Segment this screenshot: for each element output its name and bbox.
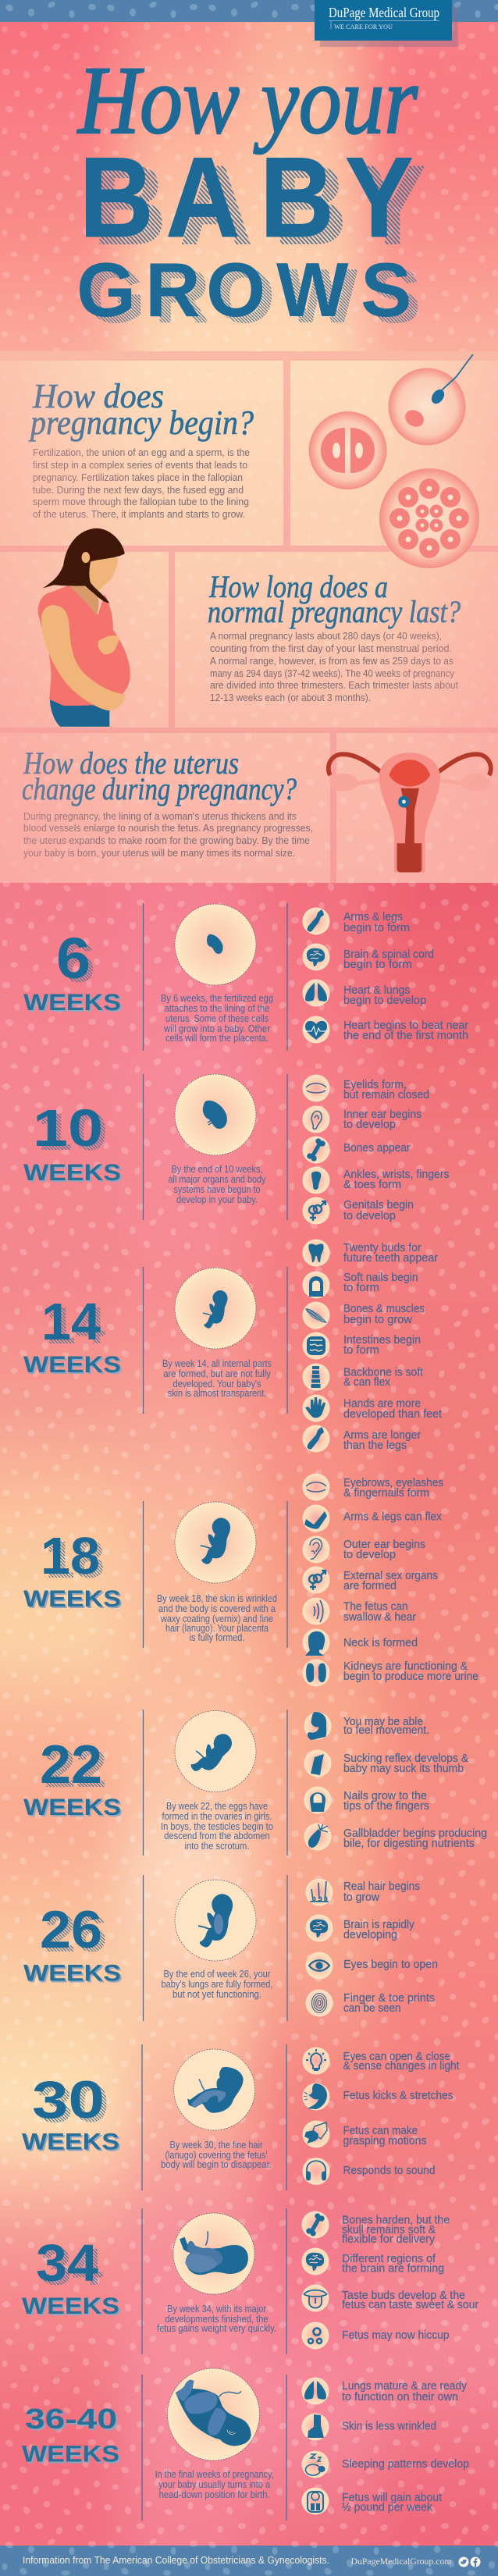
number: 6: [61, 930, 95, 994]
number: 36-40: [27, 2404, 119, 2436]
item: genitals: Genitals begin: [343, 1199, 414, 1212]
item: prints: [306, 1989, 435, 2017]
item: intestines: [303, 1332, 421, 1360]
icon: facebook: [470, 2557, 481, 2567]
caption: In boys, the testicles begin to: [161, 1821, 273, 1832]
caption: into the scrotum.: [184, 1841, 250, 1852]
item: outer ear: [303, 1536, 425, 1563]
number: 26: [40, 1900, 102, 1959]
body text: counting from the first day of your last menstrual period.: [210, 642, 452, 654]
section: 36-40 weeks: [22, 2368, 469, 2521]
item: brain: Brain is rapidly: [343, 1919, 415, 1931]
item: arms and legs: [303, 907, 410, 935]
item: bones harden: Bones harden, but the: [342, 2214, 450, 2226]
number: 30: [37, 2074, 109, 2133]
panel: how long does pregnancy last: [0, 552, 498, 728]
body text: Fertilization, the union of an egg and a sperm, is the: [33, 447, 250, 458]
item: soft nails: [303, 1271, 418, 1299]
heading: pregnancy begin?: [28, 404, 254, 442]
top band: [0, 0, 498, 22]
weeks label: WEEKS: [23, 1352, 121, 1378]
item: swallow and hear: The fetus can: [343, 1600, 408, 1613]
item: backbone: & can flex: [343, 1376, 391, 1389]
item: brain and spinal cord: [303, 943, 434, 971]
caption: developments finished, the: [165, 2314, 269, 2325]
caption: [161, 1969, 273, 2000]
item: nails: tips of the fingers: [343, 1800, 429, 1813]
number: 36-40: [25, 2403, 117, 2435]
item: arms and legs: Arms & legs: [343, 911, 403, 923]
caption: is fully formed.: [189, 1632, 245, 1643]
item: eyelids: but remain closed: [343, 1089, 429, 1101]
item: sucking reflex: Sucking reflex develops &: [343, 1752, 468, 1765]
heading: change during pregnancy?: [22, 771, 297, 806]
item: lungs mature: [301, 2378, 468, 2404]
item: arms and legs: begin to form: [343, 922, 410, 934]
item: hair: Real hair begins: [343, 1880, 420, 1893]
item: hands: Hands are more: [343, 1397, 421, 1410]
caption: [169, 1164, 266, 1205]
section: 26 weeks: [23, 1875, 438, 2021]
checklist: [303, 1474, 478, 1686]
fetus circle: [175, 1880, 256, 1961]
title line shadow: BABY: BABY: [93, 142, 427, 269]
item: brain and spinal cord: Brain & spinal cord: [343, 948, 434, 961]
weeks label: WEEKS: [22, 2129, 119, 2154]
weeks label: WEEKS: [25, 1588, 123, 1614]
title line: BABY: BABY: [80, 134, 414, 262]
divider: [144, 1074, 287, 1220]
body text: your baby is born, your uterus will be many times its normal size.: [23, 847, 295, 859]
item: teeth: [303, 1240, 438, 1266]
body text: tube. During the next few days, the fused egg and: [33, 484, 244, 496]
number: 14: [41, 1293, 101, 1351]
item: movement: You may be able: [343, 1716, 423, 1728]
item: lungs mature: Lungs mature & are ready: [342, 2380, 468, 2393]
item: hiccup: [301, 2322, 450, 2350]
weeks label: WEEKS: [22, 2442, 119, 2467]
section: 30 weeks: [22, 2044, 459, 2190]
item: inner ear: Inner ear begins: [343, 1108, 422, 1121]
number: 22: [44, 1738, 107, 1799]
intro backdrop band: [0, 351, 498, 883]
item: bones and muscles: begin to grow: [343, 1314, 413, 1326]
item: arms longer: [303, 1425, 421, 1452]
website: DuPageMedicalGroup.com: [351, 2556, 452, 2567]
item: teeth: Twenty buds for: [343, 1242, 422, 1254]
item: kicks: Fetus kicks & stretches: [343, 2090, 453, 2102]
item: grasping: [303, 2120, 426, 2148]
item: neck: [303, 1628, 418, 1656]
item: sucking reflex: baby may suck its thumb: [343, 1763, 464, 1775]
item: taste: fetus can taste sweet & sour: [342, 2299, 478, 2311]
body text: During pregnancy, the lining of a woman's uterus thickens and its: [23, 810, 297, 822]
section: 34 weeks: [22, 2208, 478, 2354]
item: backbone: Backbone is soft: [343, 1366, 423, 1379]
item: outer ear: Outer ear begins: [343, 1539, 425, 1551]
item: nails: Nails grow to the: [343, 1790, 427, 1802]
checklist: [303, 1074, 450, 1224]
panel edge tint: [0, 361, 498, 883]
item: bones: Bones appear: [343, 1142, 411, 1155]
caption: all major organs and body: [169, 1174, 266, 1185]
caption: baby's lungs are fully formed,: [161, 1979, 273, 1990]
fetus circle: [167, 2368, 259, 2460]
item: eyebrows: Eyebrows, eyelashes: [343, 1477, 443, 1489]
title line: How your: How your: [76, 47, 418, 154]
checklist: [306, 1878, 438, 2017]
item: heart and lungs: begin to develop: [343, 994, 426, 1007]
weeks label: WEEKS: [23, 2295, 121, 2321]
caption: In the final weeks of pregnancy,: [155, 2469, 274, 2480]
item: gallbladder: [304, 1823, 487, 1850]
caption: By week 18, the skin is wrinkled: [157, 1593, 277, 1604]
caption: [155, 2469, 274, 2500]
divider: [144, 903, 287, 1051]
item: weight gain: Fetus will gain about: [342, 2492, 442, 2504]
item: movement: [304, 1712, 429, 1740]
number: 22: [40, 1734, 102, 1795]
weeks label: WEEKS: [25, 991, 123, 1017]
body text: are divided into three trimesters. Each trimester lasts about: [210, 679, 458, 691]
item: intestines: to form: [343, 1344, 379, 1357]
heading: How does the uterus: [23, 745, 239, 781]
caption: [161, 2140, 272, 2170]
item: weight gain: [301, 2487, 442, 2515]
number: 6: [56, 926, 91, 991]
body text: first step in a complex series of events that leads to: [33, 459, 247, 471]
body text: blood vessels enlarge to nourish the fetus. As pregnancy progresses,: [23, 822, 313, 834]
divider: [142, 2375, 286, 2521]
heading: normal pregnancy last?: [208, 594, 461, 629]
item: hair: to grow: [343, 1891, 379, 1904]
item: grasping: grasping motions: [343, 2135, 426, 2147]
item: ankles and wrists: & toes form: [343, 1179, 401, 1191]
item: brain: [306, 1914, 415, 1942]
body text: A normal pregnancy lasts about 280 days (or 40 weeks),: [210, 630, 442, 642]
section: 10 weeks: [23, 1074, 450, 1224]
weeks label: WEEKS: [23, 1160, 121, 1186]
caption: [162, 1358, 272, 1399]
item: hiccup: Fetus may now hiccup: [342, 2329, 450, 2342]
item: brain regions: [301, 2248, 444, 2275]
item: genitals: to develop: [343, 1210, 396, 1222]
item: grasping: Fetus can make: [343, 2125, 418, 2137]
body text: the uterus expands to make room for the growing baby. By the time: [23, 834, 310, 846]
caption: [157, 1593, 277, 1643]
body text: many as 294 days (37-42 weeks). The 40 weeks of pregnancy: [210, 667, 454, 679]
body text: of the uterus. There, it implants and starts to grow.: [33, 508, 245, 520]
checklist: [303, 1240, 442, 1452]
item: skin: Skin is less wrinkled: [342, 2420, 436, 2432]
weeks label: WEEKS: [22, 2293, 119, 2319]
checklist: [301, 2378, 469, 2515]
item: kicks: [303, 2083, 453, 2111]
fetus circle: [175, 1711, 256, 1792]
body text: [33, 447, 250, 520]
weeks label: WEEKS: [23, 1586, 121, 1612]
item: inner ear: to develop: [343, 1119, 396, 1131]
number: 26: [44, 1904, 107, 1963]
number: 18: [41, 1527, 100, 1585]
item: bones and muscles: Bones & muscles: [343, 1303, 425, 1315]
item: bones: [303, 1137, 411, 1163]
item: hair: [306, 1878, 420, 1906]
item: eyebrows: & fingernails form: [343, 1487, 429, 1500]
item: brain regions: Different regions of: [342, 2253, 436, 2265]
item: intestines: Intestines begin: [343, 1334, 421, 1347]
caption: uterus. Some of these cells: [165, 1013, 269, 1024]
item: ankles and wrists: Ankles, wrists, fingers: [343, 1169, 450, 1181]
section: 14 weeks: [23, 1240, 442, 1452]
item: sound: [303, 2158, 436, 2185]
item: flex: Arms & legs can flex: [343, 1511, 443, 1524]
item: swallow and hear: [303, 1597, 416, 1625]
caption: By week 14, all internal parts: [162, 1358, 272, 1369]
section: 6 weeks: [23, 903, 468, 1051]
caption: waxy coating (vernix) and fine: [160, 1614, 273, 1624]
fetus circle: [175, 1502, 256, 1583]
item: prints: Finger & toe prints: [343, 1992, 435, 2005]
weeks label: WEEKS: [25, 1796, 123, 1822]
number: 14: [46, 1297, 105, 1355]
item: lungs mature: to function on their own: [342, 2391, 458, 2403]
background: speckle texture: [0, 22, 498, 352]
caption: By the end of week 26, your: [164, 1969, 270, 1980]
fetus circle: [175, 1268, 256, 1349]
number: 34: [36, 2234, 98, 2293]
item: bones harden: flexible for delivery: [342, 2233, 436, 2246]
item: kidneys: begin to produce more urine: [343, 1670, 478, 1683]
weeks label: WEEKS: [23, 1795, 121, 1820]
fetus circle: [175, 904, 256, 985]
body text: [210, 630, 458, 703]
fetus circle: [174, 2049, 255, 2130]
item: sex organs: are formed: [343, 1580, 397, 1592]
item: teeth: future teeth appear: [343, 1252, 438, 1265]
weeks label: WEEKS: [23, 990, 121, 1016]
weeks label: WEEKS: [25, 1162, 123, 1187]
caption: By week 22, the eggs have: [166, 1801, 268, 1812]
item: eyes: Eyes begin to open: [343, 1959, 438, 1971]
caption: but not yet functioning.: [173, 1989, 261, 2000]
background: timeline watercolor gradient: [0, 812, 498, 2576]
caption: (lanugo) covering the fetus': [165, 2150, 267, 2161]
number: 34: [41, 2238, 103, 2297]
item: eyes sense light: & sense changes in light: [343, 2060, 459, 2073]
illustration: uterus: [329, 753, 491, 873]
caption: formed in the ovaries in girls.: [162, 1811, 272, 1822]
fetus circle: [175, 1074, 256, 1155]
icon: cell cluster: [379, 468, 479, 568]
icon: twitter: [459, 2557, 468, 2567]
item: prints: can be seen: [343, 2002, 401, 2015]
divider: [144, 1710, 287, 1856]
item: sleep: Sleeping patterns develop: [342, 2458, 469, 2471]
caption: body will begin to disappear.: [161, 2159, 272, 2170]
body text: 12-13 weeks each (or about 3 months).: [210, 692, 371, 703]
number: 10: [37, 1103, 108, 1162]
background: top pink-to-peach gradient: [0, 22, 498, 351]
caption: will grow into a baby. Other: [163, 1023, 270, 1034]
item: soft nails: Soft nails begin: [343, 1272, 418, 1284]
divider: [142, 2208, 286, 2354]
item: bones and muscles: [303, 1302, 425, 1329]
caption: cells will form the placenta.: [165, 1033, 269, 1044]
caption: [157, 2304, 276, 2334]
number: 10: [33, 1099, 103, 1158]
heading: How long does a: [208, 569, 388, 604]
heading: How does: [32, 377, 164, 415]
item: skin: [301, 2414, 436, 2440]
caption: systems have begun to: [173, 1184, 261, 1195]
caption: develop in your baby.: [176, 1194, 258, 1205]
logo block: DuPage Medical Group: [329, 5, 439, 20]
item: heart beat: Heart begins to beat near: [343, 1019, 468, 1032]
item: soft nails: to form: [343, 1282, 379, 1294]
item: eyes: [306, 1952, 438, 1980]
item: arms longer: Arms are longer: [343, 1429, 421, 1442]
caption: By the end of 10 weeks,: [172, 1164, 262, 1175]
checklist: [303, 907, 468, 1043]
checklist: [301, 2211, 478, 2350]
weeks label: WEEKS: [23, 2443, 121, 2468]
caption: By week 34, with its major: [167, 2304, 266, 2314]
item: flex: [303, 1505, 443, 1532]
divider: [144, 1267, 287, 1414]
caption: are formed, but are not fully: [163, 1368, 271, 1379]
item: heart and lungs: [303, 979, 426, 1007]
caption: fetus gains weight very quickly.: [157, 2323, 276, 2334]
item: ankles and wrists: [303, 1166, 450, 1194]
checklist: [304, 1712, 487, 1850]
section: 18 weeks: [23, 1474, 478, 1686]
caption: [161, 993, 273, 1044]
body text: [23, 810, 313, 859]
item: kidneys: Kidneys are functioning &: [343, 1660, 468, 1673]
item: eyes sense light: [303, 2047, 459, 2075]
caption: attaches to the lining of the: [164, 1003, 270, 1014]
icon: egg and sperm: [389, 354, 473, 445]
caption: descend from the abdomen: [164, 1831, 270, 1841]
source text: Information from The American College of Obstetricians & Gynecologists.: [23, 2554, 329, 2566]
caption: developed. Your baby's: [173, 1379, 261, 1389]
weeks label: WEEKS: [23, 1961, 121, 1986]
divider: [144, 1875, 287, 2021]
number: 30: [32, 2070, 105, 2129]
item: nails: [304, 1786, 429, 1814]
title line shadow: GROWS: GROWS: [86, 253, 421, 339]
body text: pregnancy. Fertilization takes place in the fallopian: [33, 471, 243, 483]
item: neck: Neck is formed: [343, 1637, 418, 1649]
caption: and the body is covered with a: [158, 1603, 276, 1614]
logo block: WE CARE FOR YOU: [334, 23, 393, 30]
number: 18: [45, 1531, 105, 1589]
item: sucking reflex: [304, 1750, 468, 1777]
heading: [208, 569, 461, 629]
item: weight gain: ½ pound per week: [342, 2502, 433, 2514]
item: eyelids: Eyelids form,: [343, 1079, 407, 1091]
item: movement: to feel movement.: [343, 1724, 429, 1737]
caption: head-down position for birth.: [159, 2489, 270, 2500]
body text: A normal range, however, is from as few as 259 days to as: [210, 655, 454, 667]
item: backbone: [303, 1363, 423, 1391]
item: hands: developed than feet: [343, 1408, 442, 1421]
logo block: [315, 0, 457, 47]
caption: skin is almost transparent.: [168, 1388, 266, 1399]
sperm: [429, 354, 473, 406]
item: sex organs: [303, 1566, 438, 1594]
title: [76, 47, 427, 339]
divider: [144, 1501, 287, 1648]
caption: your baby usually turns into a: [158, 2479, 270, 2490]
panel: how does pregnancy begin: [0, 361, 498, 546]
item: swallow and hear: swallow & hear: [343, 1611, 416, 1624]
caption: [161, 1801, 273, 1852]
item: heart beat: the end of the first month: [343, 1030, 468, 1042]
fetus circle: [173, 2213, 254, 2294]
item: genitals: [303, 1197, 414, 1224]
caption: By 6 weeks, the fertilized egg: [161, 993, 273, 1004]
heading: [28, 377, 254, 442]
item: eyelids: [303, 1074, 429, 1102]
checklist: [303, 2047, 459, 2185]
weeks label: WEEKS: [25, 1354, 123, 1379]
item: brain: developing: [343, 1929, 397, 1941]
item: brain and spinal cord: begin to form: [343, 959, 412, 971]
item: kidneys: [303, 1660, 478, 1686]
illustration: pregnant woman: [38, 528, 130, 727]
item: bones harden: [301, 2211, 450, 2246]
item: outer ear: to develop: [343, 1549, 396, 1561]
item: sleep: [301, 2451, 469, 2478]
heading: [22, 745, 297, 806]
item: hands: [303, 1394, 442, 1422]
item: gallbladder: Gallbladder begins producing: [343, 1827, 487, 1840]
weeks label: WEEKS: [23, 2131, 121, 2156]
weeks label: WEEKS: [25, 1962, 123, 1987]
body text: sperm move through the fallopian tube to the lining: [33, 496, 249, 507]
footer band: [0, 2546, 498, 2576]
item: inner ear: [303, 1105, 422, 1133]
item: bones harden: skull remains soft &: [342, 2224, 436, 2236]
item: eyebrows: [303, 1474, 443, 1500]
item: arms longer: than the legs: [343, 1439, 407, 1452]
item: taste: [301, 2284, 478, 2312]
item: heart beat: [303, 1016, 468, 1043]
background: timeline speckle texture: [0, 883, 498, 2546]
caption: hair (lanugo). Your placenta: [165, 1623, 269, 1634]
caption: By week 30, the fine hair: [170, 2140, 262, 2151]
item: sound: Responds to sound: [343, 2165, 436, 2177]
section: 22 weeks: [23, 1710, 487, 1856]
item: gallbladder: bile, for digesting nutrients: [343, 1838, 475, 1850]
panel: how does the uterus change: [0, 733, 498, 883]
divider: [142, 2044, 286, 2190]
icon: two-cell stage: [309, 411, 387, 489]
item: taste: Taste buds develop & the: [342, 2290, 465, 2302]
item: heart and lungs: Heart & lungs: [343, 984, 411, 997]
item: sex organs: External sex organs: [343, 1570, 438, 1582]
item: eyes sense light: Eyes can open & close: [343, 2051, 450, 2063]
title line: GROWS: GROWS: [76, 247, 411, 333]
item: brain regions: the brain are forming: [342, 2262, 444, 2275]
